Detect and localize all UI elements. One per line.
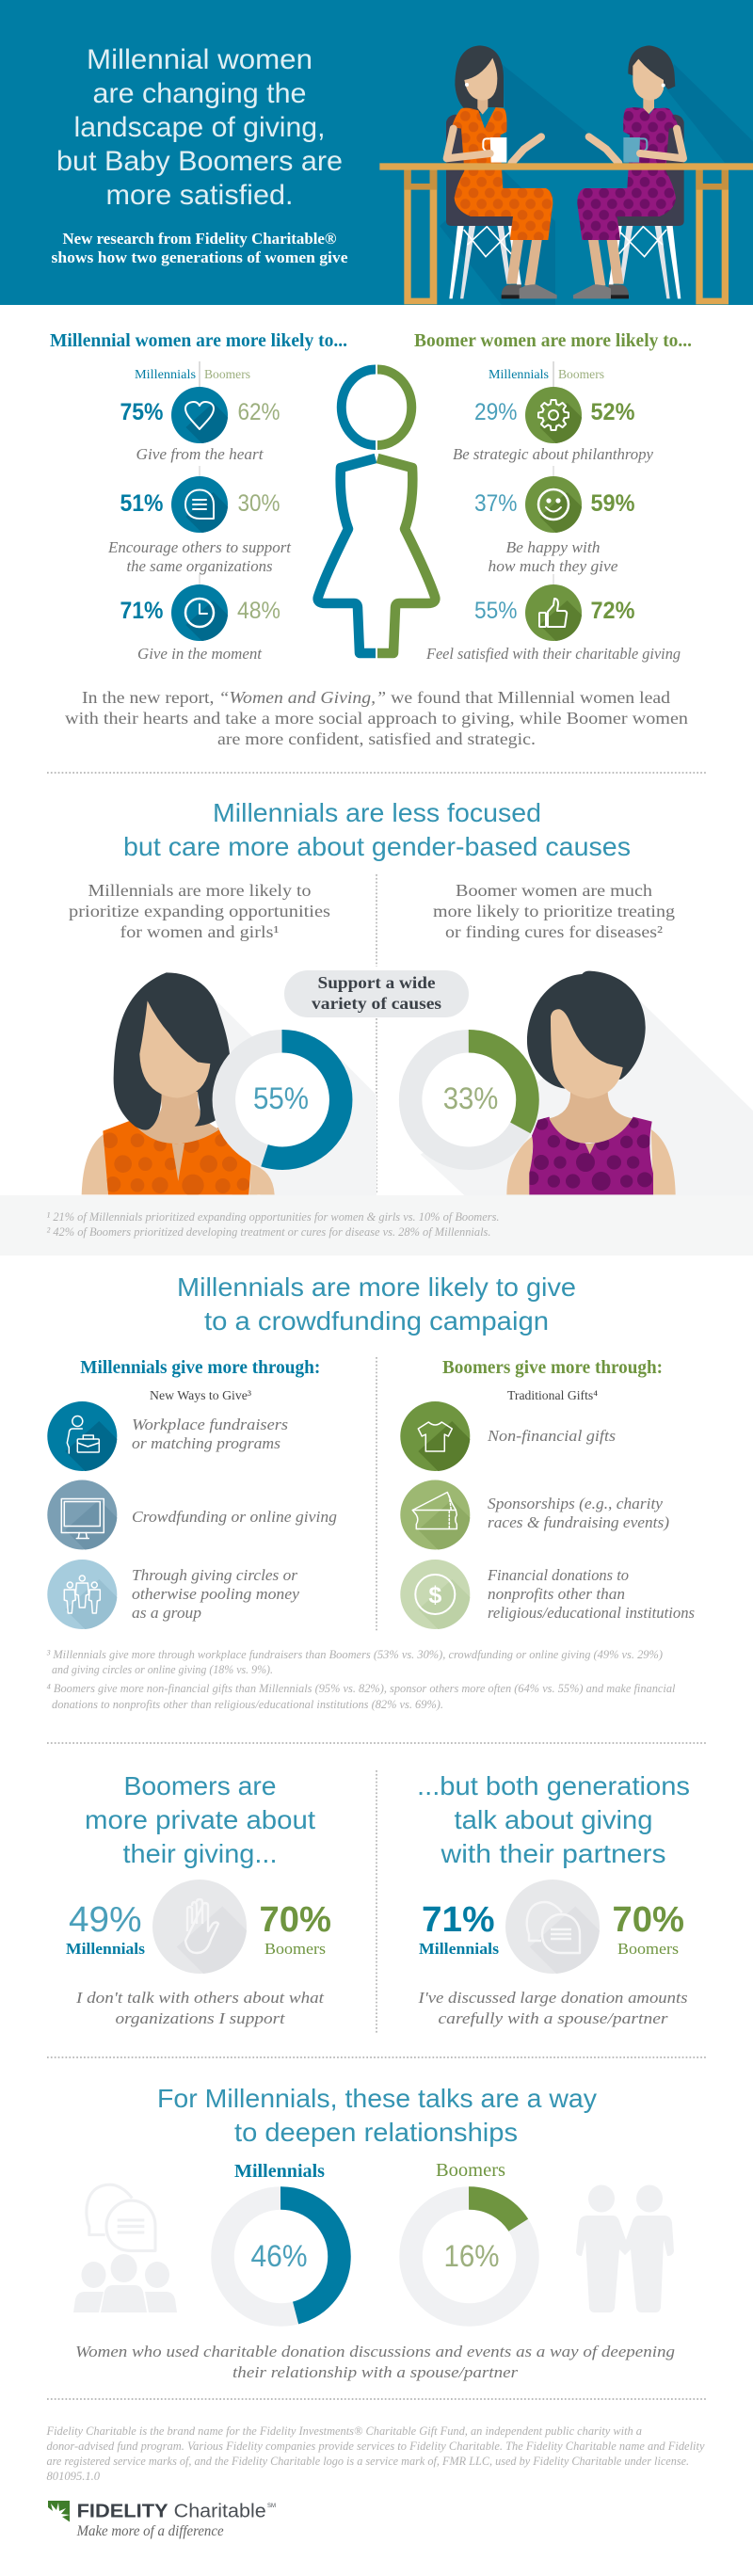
footnotes: ³ Millennials give more through workplace fundraisers than Boomers (53% vs. 30%), crowdfunding or online giving (49% vs. 29%) xyxy=(47,1647,663,1661)
stat: 70% boomers: 70% xyxy=(260,1900,331,1940)
item: sponsorships xyxy=(400,1480,669,1549)
item: crowdfunding xyxy=(47,1480,337,1549)
heading: their giving... xyxy=(122,1839,277,1868)
heading: Boomers are xyxy=(124,1771,277,1800)
donut chart: 46% millennials: 46% xyxy=(250,2239,307,2273)
caption: organizations I support xyxy=(115,2009,286,2027)
donut chart: 46% millennials: Millennials xyxy=(234,2161,325,2182)
footnotes band xyxy=(0,1195,753,1256)
stat: give in the moment: 71% xyxy=(120,598,164,624)
title: more satisfied. xyxy=(105,180,294,211)
summary paragraph: with their hearts and take a more social approach to giving, while Boomer women xyxy=(65,709,688,728)
title: landscape of giving, xyxy=(73,112,326,143)
caption xyxy=(417,1989,688,2027)
stat: give in the moment: 48% xyxy=(237,598,280,624)
icon: heart xyxy=(185,402,214,429)
stat: 70% boomers: 70% xyxy=(612,1900,684,1940)
icon: chat bubble xyxy=(185,489,214,519)
icon: speech bubbles xyxy=(527,1902,580,1953)
stat: 49% millennials xyxy=(66,1900,145,1958)
stat: 70% boomers: Boomers xyxy=(264,1940,326,1958)
item: giving circles xyxy=(47,1560,299,1629)
callout: support a wide variety of causes: variety of causes xyxy=(312,994,441,1013)
heading: millennial women: Millennial women are more likely to... xyxy=(50,331,347,351)
icon: green burst square xyxy=(48,2501,70,2522)
caption: their relationship with a spouse/partner xyxy=(232,2363,518,2381)
text: millennials priority: Millennials are more likely to xyxy=(88,881,311,900)
icon: tickets xyxy=(412,1493,457,1528)
section: deepen relationships xyxy=(73,2084,675,2381)
heading: Millennials are more likely to give xyxy=(177,1272,576,1302)
stat: be happy xyxy=(474,466,634,575)
left column legend: Millennials xyxy=(135,367,196,381)
subtitle xyxy=(51,230,348,266)
donut chart: 16% boomers: Boomers xyxy=(436,2160,505,2181)
text: millennials priority xyxy=(69,881,330,941)
heading: For Millennials, these talks are a way xyxy=(157,2084,597,2113)
donut chart: 16% boomers xyxy=(410,2160,527,2315)
long shadows behind women xyxy=(440,64,753,305)
heading: more private about xyxy=(85,1805,315,1834)
stat: 49% millennials: Millennials xyxy=(66,1940,145,1958)
stat: be happy: 37% xyxy=(474,490,518,517)
stat: be happy: Be happy with xyxy=(506,538,601,556)
subtitle: New research from Fidelity Charitable® xyxy=(62,230,337,248)
summary paragraph: In the new report, “Women and Giving,” we found that Millennial women lead xyxy=(82,688,670,707)
text: millennials priority: prioritize expanding opportunities xyxy=(69,902,330,920)
icon: t-shirt xyxy=(418,1422,452,1451)
text: boomer priority xyxy=(433,881,675,941)
donut chart: 55%: 55% xyxy=(253,1081,309,1115)
item: financial donations: nonprofits other than xyxy=(488,1585,625,1603)
item: giving circles: otherwise pooling money xyxy=(132,1585,299,1603)
heading: to a crowdfunding campaign xyxy=(204,1306,549,1336)
stat: feel satisfied: Feel satisfied with their charitable giving xyxy=(425,645,681,663)
stat: give in the moment xyxy=(120,574,280,663)
footnotes: donations to nonprofits other than religious/educational institutions (82% vs. 69%). xyxy=(52,1697,443,1711)
summary paragraph xyxy=(65,688,688,748)
left woman xyxy=(447,45,557,298)
footnotes: ⁴ Boomers give more non-financial gifts than Millennials (95% vs. 82%), sponsor others more often (64% vs. 55%) and make financial xyxy=(47,1681,676,1695)
item: workplace fundraisers xyxy=(47,1401,288,1471)
portrait: boomer woman xyxy=(421,971,753,1195)
heading xyxy=(157,2084,597,2147)
icon: talking group xyxy=(73,2184,177,2312)
title: are changing the xyxy=(92,78,307,109)
right column legend xyxy=(489,361,604,387)
icon: monitor xyxy=(61,1498,104,1538)
stat: 71% millennials xyxy=(419,1900,499,1958)
heading: with their partners xyxy=(440,1839,666,1868)
header banner xyxy=(0,0,753,305)
legal disclaimer: donor-advised fund program. Various Fidelity companies provide services to Fidelity Charitable. The Fidelity Charitable name and Fidelity xyxy=(47,2439,705,2453)
column heading: boomers: Traditional Gifts⁴ xyxy=(507,1389,598,1403)
right column legend: Millennials xyxy=(489,367,549,381)
stat: be strategic: 29% xyxy=(474,399,518,425)
text: boomer priority: Boomer women are much xyxy=(456,881,652,900)
table xyxy=(379,163,753,304)
heading: boomer women: Boomer women are more likely to... xyxy=(414,331,692,351)
woman outline figure xyxy=(318,369,435,653)
stat: encourage others: 51% xyxy=(120,490,164,517)
heading: but care more about gender-based causes xyxy=(123,832,631,861)
text: millennials priority: for women and girls¹ xyxy=(120,922,279,941)
stat: give from the heart xyxy=(120,387,280,463)
stat: give from the heart: Give from the heart xyxy=(136,445,264,463)
footnotes xyxy=(47,1647,676,1711)
column heading: millennials xyxy=(80,1357,320,1403)
heading: Millennials are less focused xyxy=(213,798,541,827)
stat: 71% millennials: 71% xyxy=(422,1900,495,1940)
section: causes xyxy=(0,798,753,1256)
item: crowdfunding: Crowdfunding or online giving xyxy=(132,1508,337,1526)
icon: raised hand xyxy=(185,1899,218,1953)
item: non-financial gifts: Non-financial gifts xyxy=(487,1427,616,1445)
heading: ...but both generations xyxy=(417,1771,690,1800)
title: but Baby Boomers are xyxy=(56,146,343,177)
stat: be strategic: Be strategic about philanthropy xyxy=(453,445,653,463)
panel: both generations talk with partners xyxy=(417,1771,690,2027)
icon: gear xyxy=(538,400,569,430)
icon: clock xyxy=(185,599,214,627)
summary paragraph: are more confident, satisfied and strategic. xyxy=(217,729,536,748)
item: sponsorships: races & fundraising events) xyxy=(488,1513,669,1531)
stat: be happy: 59% xyxy=(591,490,634,517)
caption: carefully with a spouse/partner xyxy=(439,2009,668,2027)
item: non-financial gifts xyxy=(400,1401,616,1471)
text: boomer priority: more likely to prioritize treating xyxy=(433,902,675,920)
title xyxy=(56,44,343,211)
icon: couple holding hands xyxy=(576,2185,674,2312)
stat: encourage others: 30% xyxy=(237,490,280,517)
donut chart: 46% millennials xyxy=(222,2161,339,2315)
stat: be happy: how much they give xyxy=(488,557,618,575)
column heading: boomers xyxy=(442,1357,663,1403)
stat: feel satisfied: 55% xyxy=(474,598,518,624)
donut chart: 33%: 33% xyxy=(443,1081,498,1115)
stat: feel satisfied: 72% xyxy=(591,598,634,624)
stat: 70% boomers xyxy=(260,1900,331,1958)
section: crowdfunding xyxy=(47,1272,695,1711)
icon: person with briefcase xyxy=(67,1416,99,1453)
stat: give in the moment: Give in the moment xyxy=(137,645,263,663)
callout: support a wide variety of causes xyxy=(284,970,469,1017)
title: Millennial women xyxy=(87,44,312,75)
stat: be strategic xyxy=(453,387,653,463)
footnotes: and giving circles or online giving (18% vs. 9%). xyxy=(52,1662,273,1676)
illustration: two women at a table xyxy=(379,45,753,304)
item: workplace fundraisers: Workplace fundraisers xyxy=(132,1416,288,1433)
donut chart: 16% boomers: 16% xyxy=(444,2239,499,2273)
item: giving circles: Through giving circles or xyxy=(132,1566,297,1584)
caption xyxy=(75,2343,675,2381)
donut chart: 55% xyxy=(224,1041,341,1159)
item: financial donations: religious/educational institutions xyxy=(488,1604,695,1622)
stat: give from the heart: 62% xyxy=(237,399,280,425)
logo: Fidelity Charitable: SM xyxy=(267,2504,276,2509)
subtitle: shows how two generations of women give xyxy=(51,248,348,266)
stat: 49% millennials: 49% xyxy=(69,1900,141,1940)
stat: give from the heart: 75% xyxy=(120,399,164,425)
icon: thumbs up xyxy=(539,599,567,627)
item: financial donations xyxy=(400,1560,695,1629)
text: boomer priority: or finding cures for diseases² xyxy=(445,922,663,941)
item: workplace fundraisers: or matching programs xyxy=(132,1434,280,1452)
portrait: millennial woman xyxy=(82,972,376,1196)
column heading: boomers: Boomers give more through: xyxy=(442,1357,663,1378)
left column legend xyxy=(135,361,250,387)
logo: Fidelity Charitable: Make more of a difference xyxy=(76,2523,224,2539)
stat: 70% boomers xyxy=(612,1900,684,1958)
caption: Women who used charitable donation discussions and events as a way of deepening xyxy=(75,2343,675,2360)
donut chart: 33% xyxy=(410,1041,528,1159)
left chair xyxy=(446,115,521,298)
item: financial donations: Financial donations to xyxy=(487,1566,629,1584)
right chair xyxy=(609,115,684,298)
icon: three people xyxy=(64,1576,100,1613)
section: likelihood comparison xyxy=(47,331,707,773)
logo: Fidelity Charitable xyxy=(48,2501,276,2539)
footnotes band: ² 42% of Boomers prioritized developing treatment or cures for disease vs. 28% of Millennials. xyxy=(47,1224,491,1239)
heading: talk about giving xyxy=(454,1805,653,1834)
column heading: millennials: Millennials give more through: xyxy=(80,1357,320,1378)
stat: encourage others: the same organizations xyxy=(126,557,273,575)
item: giving circles: as a group xyxy=(132,1604,201,1622)
legal disclaimer xyxy=(46,2424,705,2483)
legal disclaimer: Fidelity Charitable is the brand name for the Fidelity Investments® Charitable Gift Fund, an independent public charity with a xyxy=(46,2424,642,2438)
heading xyxy=(123,798,631,861)
callout: support a wide variety of causes: Support a wide xyxy=(318,973,436,992)
heading xyxy=(177,1272,576,1336)
left column legend: Boomers xyxy=(204,367,250,381)
heading: to deepen relationships xyxy=(234,2118,518,2147)
right woman xyxy=(573,45,683,298)
footnotes band: ¹ 21% of Millennials prioritized expanding opportunities for women & girls vs. 10% of Boomers. xyxy=(47,1209,499,1224)
logo: Fidelity Charitable: FIDELITY xyxy=(77,2501,168,2521)
heading xyxy=(417,1771,690,1868)
heading xyxy=(85,1771,315,1868)
column heading: millennials: New Ways to Give³ xyxy=(150,1389,251,1403)
stat: 71% millennials: Millennials xyxy=(419,1940,499,1958)
stat: feel satisfied xyxy=(425,574,681,663)
caption: I've discussed large donation amounts xyxy=(417,1989,688,2007)
icon: dollar: $ xyxy=(428,1582,441,1608)
legal disclaimer: 801095.1.0 xyxy=(47,2469,101,2483)
icon: dollar xyxy=(415,1575,455,1614)
icon: smiley xyxy=(538,489,569,520)
caption xyxy=(75,1989,325,2027)
stat: 70% boomers: Boomers xyxy=(617,1940,679,1958)
legal disclaimer: are registered service marks of, and the Fidelity Charitable logo is a service mark of, FMR LLC, used by Fidelity Charitable under license. xyxy=(47,2454,689,2468)
right column legend: Boomers xyxy=(558,367,604,381)
stat: be strategic: 52% xyxy=(591,399,634,425)
item: sponsorships: Sponsorships (e.g., charity xyxy=(488,1495,663,1512)
stat: encourage others: Encourage others to support xyxy=(107,538,292,556)
caption: I don't talk with others about what xyxy=(75,1989,325,2007)
stat: encourage others xyxy=(107,466,292,575)
panel: boomers are more private xyxy=(66,1771,331,2027)
logo: Fidelity Charitable: Charitable xyxy=(174,2501,266,2521)
